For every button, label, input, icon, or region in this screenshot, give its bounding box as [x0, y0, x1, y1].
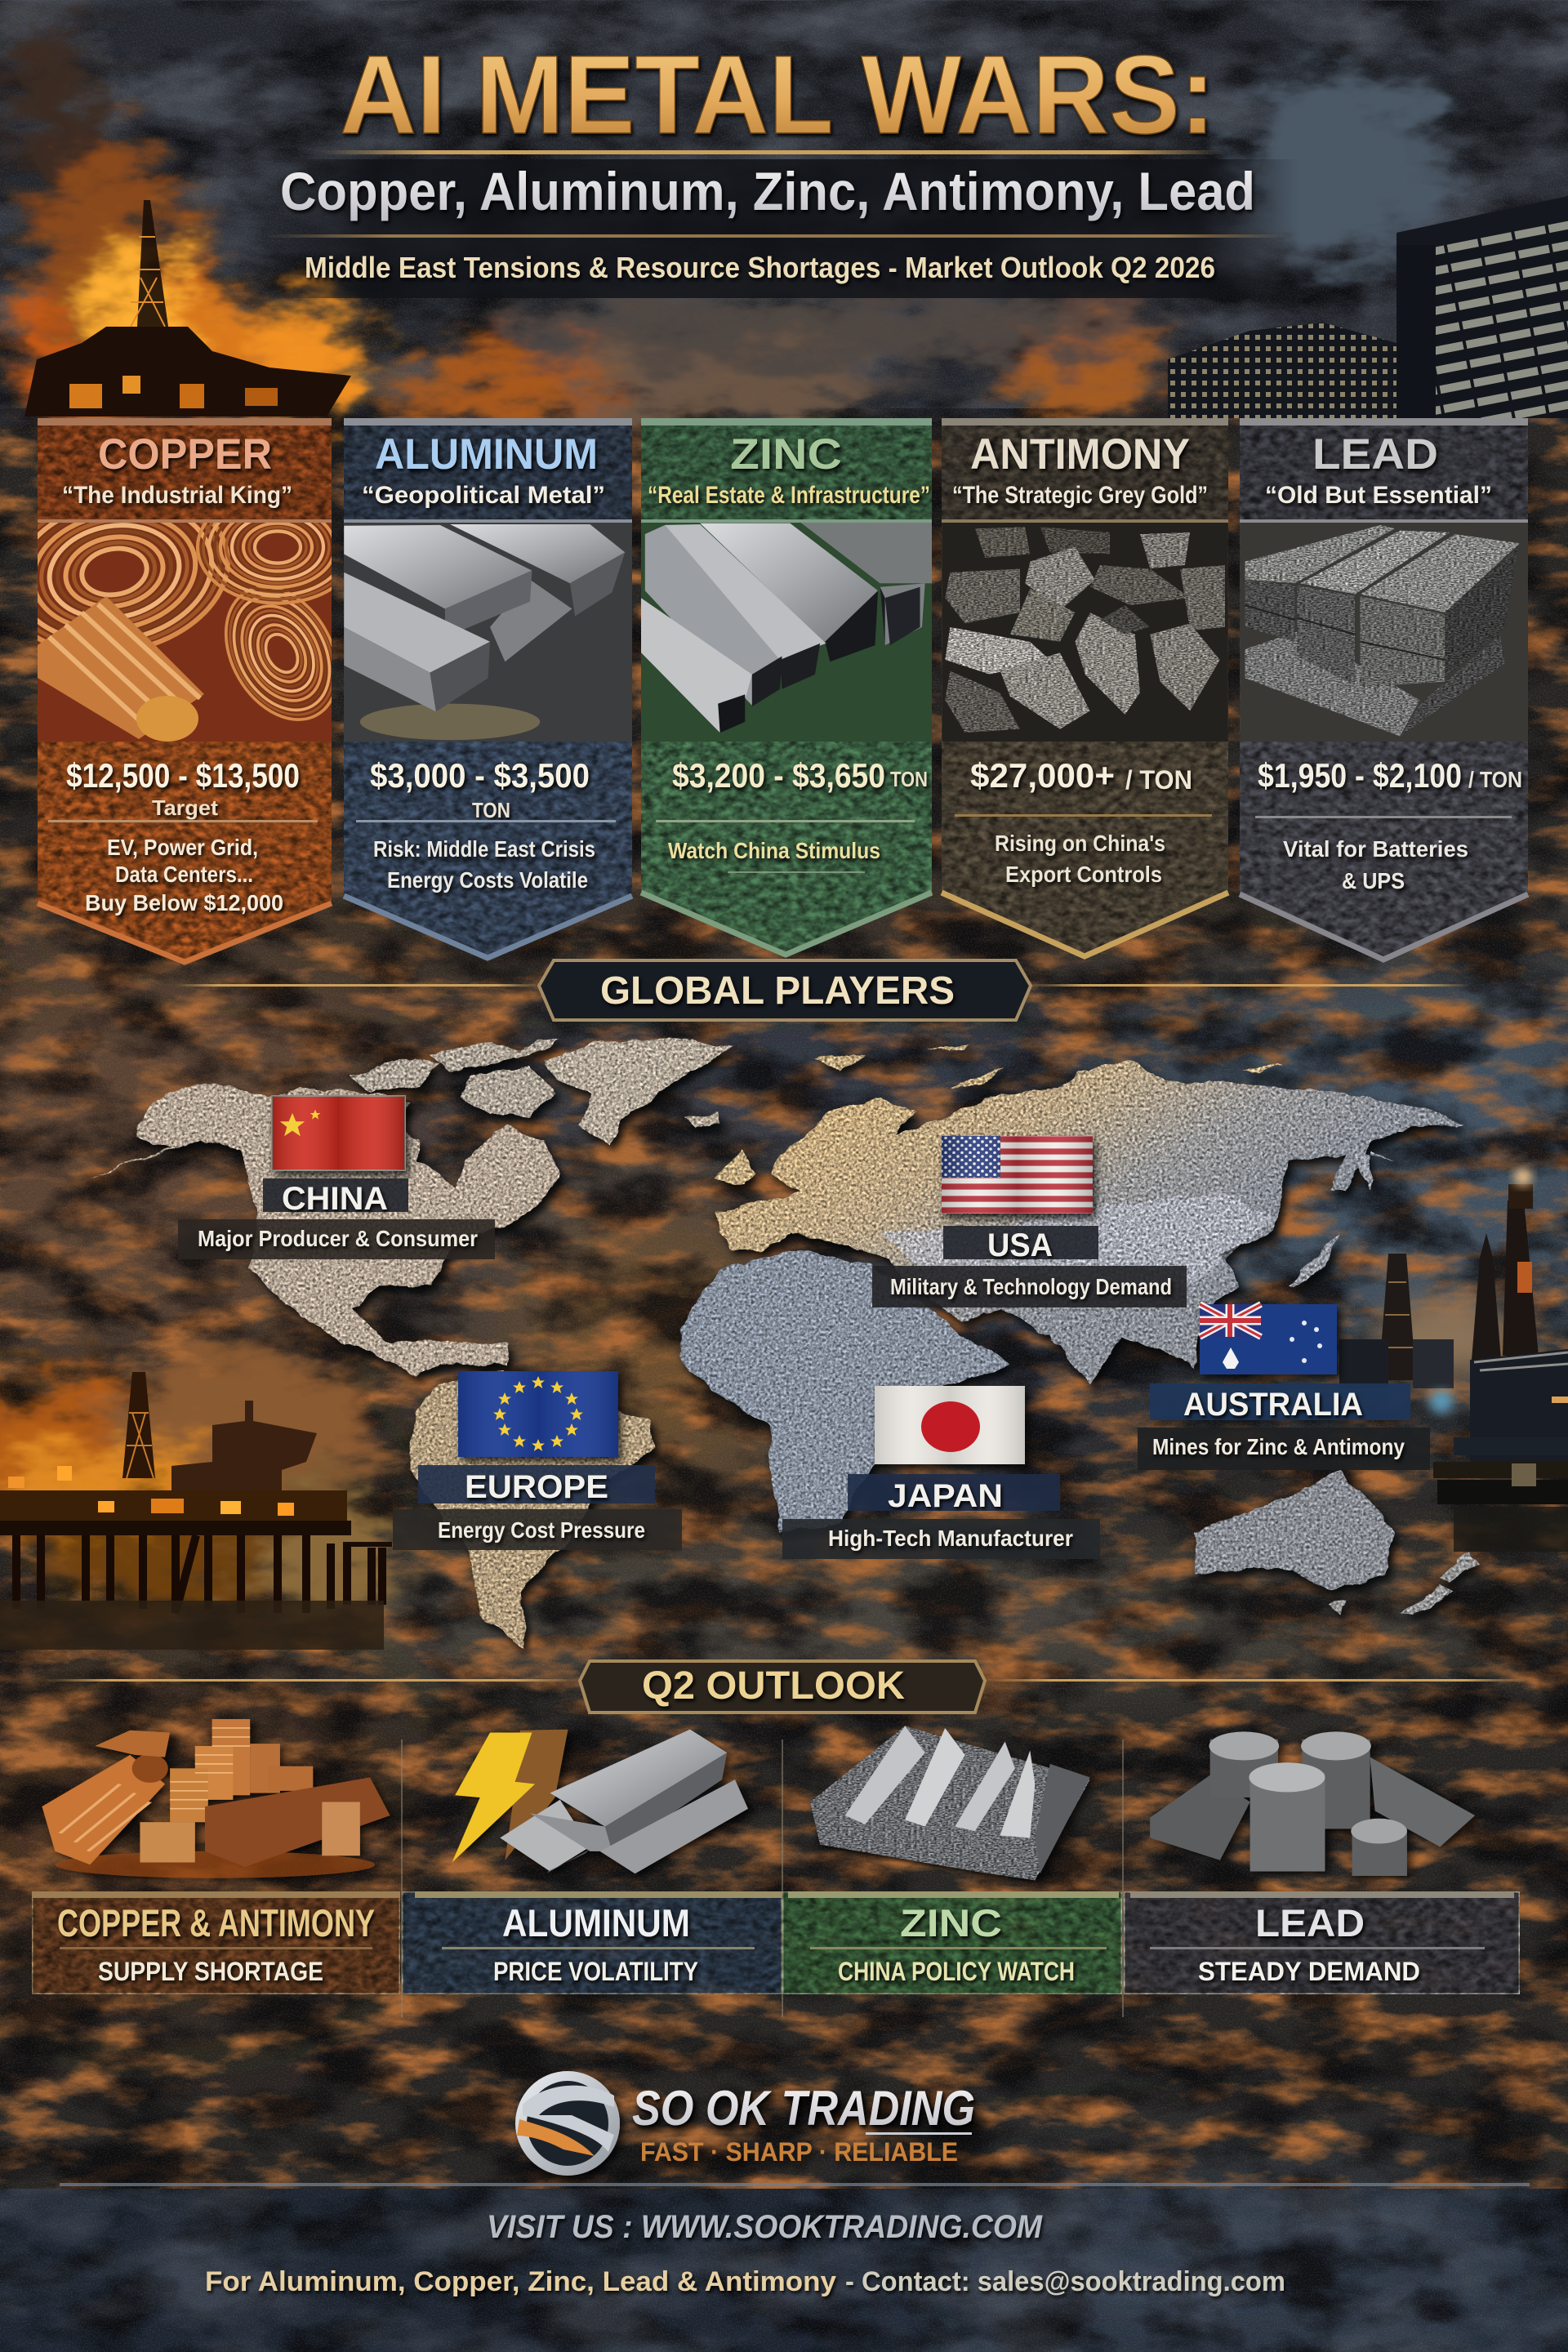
footer divider [60, 2183, 1530, 2186]
panel: antimony: Rising on China's [995, 831, 1165, 856]
panel: zinc: “Real Estate & Infrastructure” [648, 482, 930, 509]
panel: antimony: / TON [1125, 765, 1192, 795]
scene: oil rigs at right [1339, 1168, 1568, 1552]
panel: lead: / TON [1468, 767, 1522, 792]
player: japan: JAPAN [888, 1478, 1003, 1514]
image: zinc profiles [641, 522, 932, 742]
south america [410, 1371, 655, 1649]
world map [80, 1038, 1480, 1649]
title: AI METAL WARS: [340, 33, 1215, 158]
heading: q2 outlook: Q2 OUTLOOK [642, 1664, 905, 1708]
panel: copper: EV, Power Grid, [107, 835, 258, 860]
player: china: Major Producer & Consumer [198, 1226, 478, 1251]
panel: copper: Target [152, 795, 218, 820]
iceland [685, 1112, 720, 1129]
image: antimony ore [942, 522, 1228, 742]
flag: australia [1200, 1304, 1337, 1374]
outlook: copper and antimony: SUPPLY SHORTAGE [98, 1957, 323, 1986]
panel: aluminum: TON [472, 798, 510, 822]
panel: antimony: Export Controls [1005, 862, 1162, 887]
outlook: zinc: CHINA POLICY WATCH [838, 1957, 1075, 1986]
flag: japan [875, 1386, 1025, 1464]
panel: copper: COPPER [98, 430, 272, 479]
player: japan: High-Tech Manufacturer [828, 1526, 1073, 1551]
outlook dividers [402, 1740, 1123, 2017]
panel: lead: & UPS [1342, 868, 1405, 893]
footer: contact [205, 2266, 1285, 2297]
outlook: copper and antimony [32, 1719, 400, 1994]
panel: aluminum: “Geopolitical Metal” [362, 482, 605, 509]
player: australia: Mines for Zinc & Antimony [1152, 1434, 1405, 1459]
outlook: lead: LEAD [1255, 1901, 1365, 1944]
player: europe: EUROPE [465, 1469, 608, 1505]
image: aluminum bars [344, 522, 632, 742]
north america [80, 1082, 560, 1376]
icon: logo mark [515, 2071, 620, 2176]
panel: antimony: $27,000+ [970, 756, 1115, 795]
panel: copper: $12,500 - $13,500 [66, 756, 300, 795]
icon: oil rig [24, 200, 351, 416]
outlook: lead [1124, 1731, 1520, 1994]
panel: copper: Data Centers... [115, 862, 253, 887]
icon: corrugated zinc [810, 1726, 1090, 1880]
outlook: aluminum [402, 1730, 782, 1994]
panel: zinc: ZINC [730, 430, 842, 479]
flag: european union [458, 1371, 618, 1457]
player: europe [393, 1371, 682, 1550]
title [265, 33, 1298, 298]
panel: aluminum: Risk: Middle East Crisis [373, 836, 595, 862]
panel: zinc [641, 418, 932, 957]
scene: burning refinery at left [0, 1348, 400, 1650]
player: usa: Military & Technology Demand [890, 1274, 1172, 1299]
outlook: aluminum: ALUMINUM [502, 1901, 690, 1944]
panel: copper [36, 418, 333, 965]
icon: office towers [1168, 196, 1568, 418]
footer: contact: For Aluminum, Copper, Zinc, Lead & Antimony [205, 2266, 836, 2297]
panel: antimony [942, 418, 1228, 959]
icon: aluminum ingots with lightning [452, 1730, 748, 1873]
panel: aluminum: $3,000 - $3,500 [370, 756, 590, 795]
flag: usa [942, 1136, 1093, 1214]
flag: china [272, 1096, 405, 1170]
panel: lead: Vital for Batteries [1283, 836, 1468, 862]
panel: antimony: ANTIMONY [970, 430, 1190, 479]
fire and smoke [0, 24, 1446, 433]
player: europe: Energy Cost Pressure [438, 1517, 645, 1543]
panel: copper: “The Industrial King” [62, 482, 292, 509]
heading: global players [175, 960, 1470, 1020]
player: usa [872, 1136, 1187, 1307]
panel: zinc: $3,200 - $3,650 [672, 756, 885, 795]
eurasia [715, 1060, 1465, 1387]
panel: zinc: Watch China Stimulus [668, 838, 880, 863]
player: china [178, 1096, 495, 1259]
player: australia: AUSTRALIA [1183, 1387, 1363, 1423]
player: japan [782, 1386, 1100, 1559]
logo: so ok trading [515, 2071, 975, 2176]
uk and islands [715, 1045, 1285, 1183]
panel: aluminum: Energy Costs Volatile [387, 867, 588, 893]
panel: aluminum: ALUMINUM [375, 430, 598, 479]
scene: burning oil rig and city skyline [0, 24, 1568, 433]
panel: lead: LEAD [1312, 430, 1438, 479]
title: Copper, Aluminum, Zinc, Antimony, Lead [280, 161, 1255, 221]
outlook: aluminum: PRICE VOLATILITY [493, 1957, 698, 1986]
outlook: lead: STEADY DEMAND [1198, 1957, 1420, 1986]
panel: lead: “Old But Essential” [1265, 482, 1492, 509]
panel: lead: $1,950 - $2,100 [1258, 756, 1462, 795]
image: lead ingots [1240, 522, 1528, 742]
heading: q2 outlook [45, 1661, 1530, 1713]
africa [680, 1250, 1010, 1533]
panel: lead [1240, 418, 1528, 962]
new zealand [1328, 1551, 1480, 1617]
outlook: copper and antimony: COPPER & ANTIMONY [57, 1901, 375, 1944]
title: Middle East Tensions & Resource Shortages - Market Outlook Q2 2026 [305, 251, 1215, 284]
panel: zinc: TON [890, 767, 928, 791]
panel: aluminum [344, 418, 632, 960]
heading: global players: GLOBAL PLAYERS [600, 969, 955, 1013]
outlook: zinc [782, 1726, 1122, 1994]
icon: lead cylinders [1150, 1731, 1475, 1876]
image: copper coils [38, 523, 332, 742]
player: china: CHINA [282, 1181, 388, 1217]
icon: copper stacks [42, 1719, 390, 1878]
panel: antimony: “The Strategic Grey Gold” [952, 482, 1208, 509]
logo: so ok trading: FAST · SHARP · RELIABLE [640, 2137, 958, 2167]
japan [1290, 1152, 1395, 1286]
panel: copper: Buy Below $12,000 [85, 890, 283, 915]
logo: so ok trading: SO OK TRADING [632, 2081, 975, 2136]
footer: contact: - Contact: sales@sooktrading.com [845, 2266, 1285, 2297]
china highlight [880, 1192, 1275, 1286]
australia [1195, 1470, 1395, 1591]
greenland [545, 1038, 735, 1145]
player: usa: USA [987, 1227, 1053, 1263]
arctic islands [350, 1038, 560, 1116]
outlook: zinc: ZINC [900, 1901, 1002, 1944]
player: australia [1138, 1304, 1430, 1470]
footer: website: VISIT US : WWW.SOOKTRADING.COM [487, 2209, 1044, 2245]
